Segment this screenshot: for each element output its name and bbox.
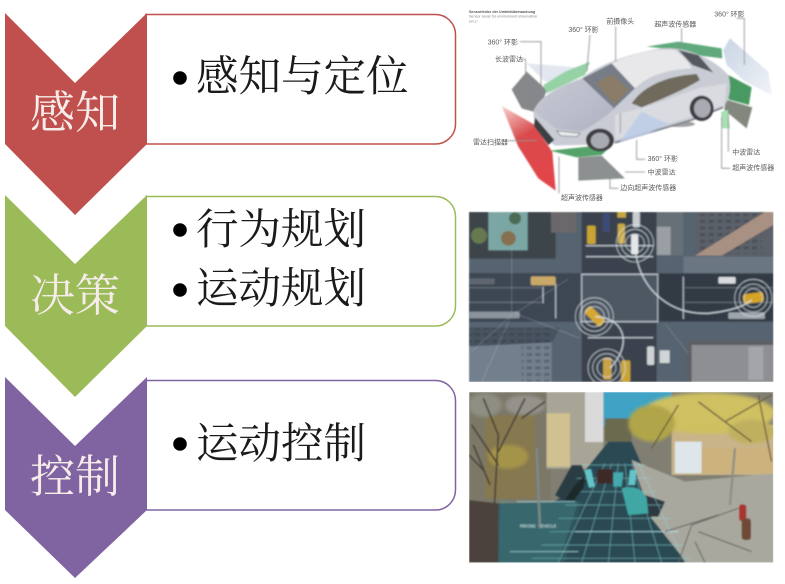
bullet item: 行为规划: 行为规划	[196, 207, 366, 254]
bare trees	[469, 395, 772, 563]
side windows	[632, 74, 700, 107]
sensor labels: 360° 环影	[488, 37, 518, 46]
sensor labels: 中波雷达	[732, 148, 760, 157]
panel: 感知与定位 box	[146, 14, 456, 144]
door panels	[615, 83, 727, 140]
hood	[534, 78, 615, 132]
sensor labels: EP117	[469, 20, 478, 24]
roof	[612, 50, 692, 90]
pedestrians	[739, 504, 751, 540]
road and pavement	[469, 442, 773, 563]
roads	[469, 212, 773, 382]
sensor labels: 超声波传感器	[732, 163, 774, 172]
image: street scene with sensor overlay	[468, 392, 775, 563]
sensor rings and paths	[472, 225, 772, 386]
sensor labels: Sensorfelder der Umfeldüberwachung	[469, 10, 535, 14]
sensor labels: 中波雷达	[648, 168, 676, 177]
bullet item: 感知与定位: 感知与定位	[196, 54, 409, 101]
chevron: 感知	[5, 13, 147, 215]
sensor labels: 长波雷达	[495, 55, 523, 64]
sensor labels: 雷达扫描器	[473, 137, 508, 146]
row: 感知	[5, 13, 456, 215]
sensor labels: 超声波传感器	[561, 193, 603, 202]
label: 决策: 决策	[30, 271, 120, 321]
wheels	[586, 96, 714, 151]
panel: 规划 box	[146, 196, 456, 326]
buildings	[469, 212, 773, 382]
sensor labels: 360° 环影	[568, 25, 599, 34]
sensor zones	[502, 38, 772, 191]
windshield	[582, 63, 635, 108]
label: 感知: 感知	[30, 88, 120, 138]
sky and background	[469, 392, 773, 563]
sensor labels: 前摄像头	[606, 17, 634, 26]
sensor grid	[532, 463, 692, 563]
overlay panel and label	[498, 500, 678, 563]
sensor labels: 超声波传感器	[654, 19, 696, 28]
bullet item: 运动规划: 运动规划	[196, 266, 366, 313]
sensor labels: 360° 环影	[714, 10, 745, 19]
road markings	[469, 246, 773, 338]
detected vehicles	[565, 469, 648, 515]
row: 决策	[5, 195, 456, 397]
chevron: 控制	[5, 377, 147, 578]
sensor labels: 边向超声波传感器	[620, 183, 676, 192]
sensor labels: 360° 环影	[648, 154, 678, 163]
bullet item: 运动控制: 运动控制	[196, 421, 366, 468]
image: city intersection top view	[469, 212, 773, 386]
image: car sensor diagram	[469, 10, 774, 202]
car body	[533, 48, 730, 146]
row: 控制	[5, 377, 456, 578]
chevron: 决策	[5, 195, 147, 397]
overlay panel and label: MOVING VEHICLE	[520, 525, 557, 530]
label: 控制: 控制	[30, 452, 120, 502]
blue sensor cone	[620, 112, 668, 142]
panel: 运动控制 box	[146, 380, 456, 510]
front grille and headlight	[534, 117, 554, 145]
taxis and cars	[470, 212, 765, 382]
leader lines	[507, 18, 744, 193]
sensor labels: Sensor areas for environment observation	[469, 15, 537, 19]
sill shadow	[615, 107, 723, 143]
tree foliage	[468, 393, 775, 469]
sensor labels	[469, 10, 774, 202]
